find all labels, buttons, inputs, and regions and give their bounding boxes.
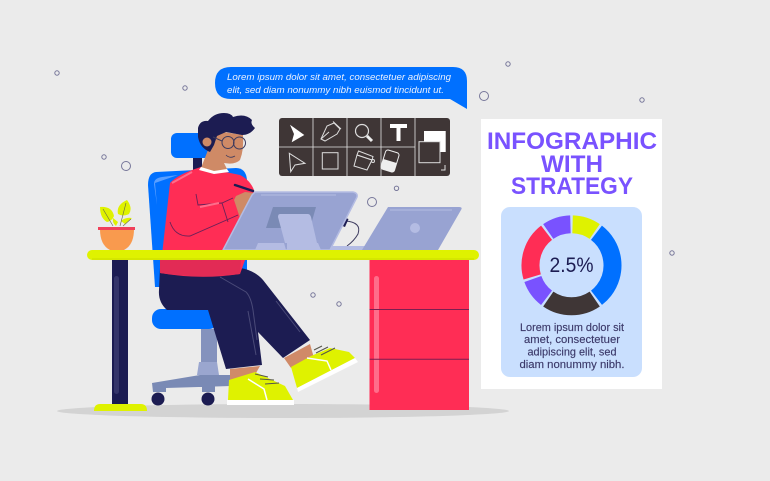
inner blue card [501,207,642,377]
desk cabinet [370,259,469,410]
donut value: 2.5% [550,254,594,277]
icon: eraser [380,149,400,173]
monitor stand slot [266,207,316,228]
chair post [201,329,217,363]
card description [520,322,624,371]
drawing tablet monitor [223,192,357,250]
shirt lower shade [160,260,241,276]
decorative small circles [55,62,674,306]
pot [100,229,134,250]
hand [234,192,255,218]
hair [198,113,255,152]
icon: outlined arrow [289,153,305,172]
heading: WITH [541,151,603,178]
desk leg [112,259,128,405]
icon: solid arrow [290,125,304,142]
chair backrest [148,168,247,287]
desk [87,250,479,411]
icon: square [322,153,338,169]
speech bubble [215,67,467,109]
shoe: back [291,346,358,392]
stylus [235,185,253,191]
chair neck [193,158,202,170]
card description: adipiscing elit, sed [528,346,616,358]
collar [199,167,229,174]
floor shadow [57,404,509,418]
bubble text [227,72,452,96]
chair [148,133,247,406]
bubble text: elit, sed diam nonummy nibh euismod tincidunt ut. [227,85,444,96]
neck and face [201,130,243,173]
panel: strategy card [481,119,662,389]
chair base [152,375,231,392]
laptop [362,207,462,250]
plant [98,200,135,250]
person [159,113,358,405]
chair wheels [152,392,214,406]
toolbar panel [279,118,450,176]
chair collar [197,362,219,375]
chair seat [152,309,218,329]
leaves [100,200,132,226]
desk foot [94,404,147,411]
heading: STRATEGY [511,173,633,200]
card description: diam nonummy nibh. [520,359,624,371]
donut chart [514,208,629,323]
icon: text tool [390,124,407,141]
monitor stand [278,214,317,243]
smile [226,155,235,157]
desk lamp [339,217,359,248]
chair headrest [171,133,211,158]
card description: amet, consectetuer [524,334,620,346]
legs and trousers [159,268,310,369]
heading [487,128,657,200]
desk top [87,250,479,260]
shirt [160,167,254,277]
ear [202,138,212,146]
ankles [230,344,314,381]
icon: paint bucket [354,151,374,170]
glasses [213,136,246,149]
desk mat [320,246,365,250]
icon: pen tool [321,122,341,141]
bubble text: Lorem ipsum dolor sit amet, consectetuer adipiscing [227,72,452,83]
icon: layers [419,131,446,170]
shoe: front [227,372,294,405]
heading: INFOGRAPHIC [487,128,657,155]
icon: magnifier [356,124,372,141]
card description: Lorem ipsum dolor sit [520,322,624,334]
shirt folds [170,194,238,236]
